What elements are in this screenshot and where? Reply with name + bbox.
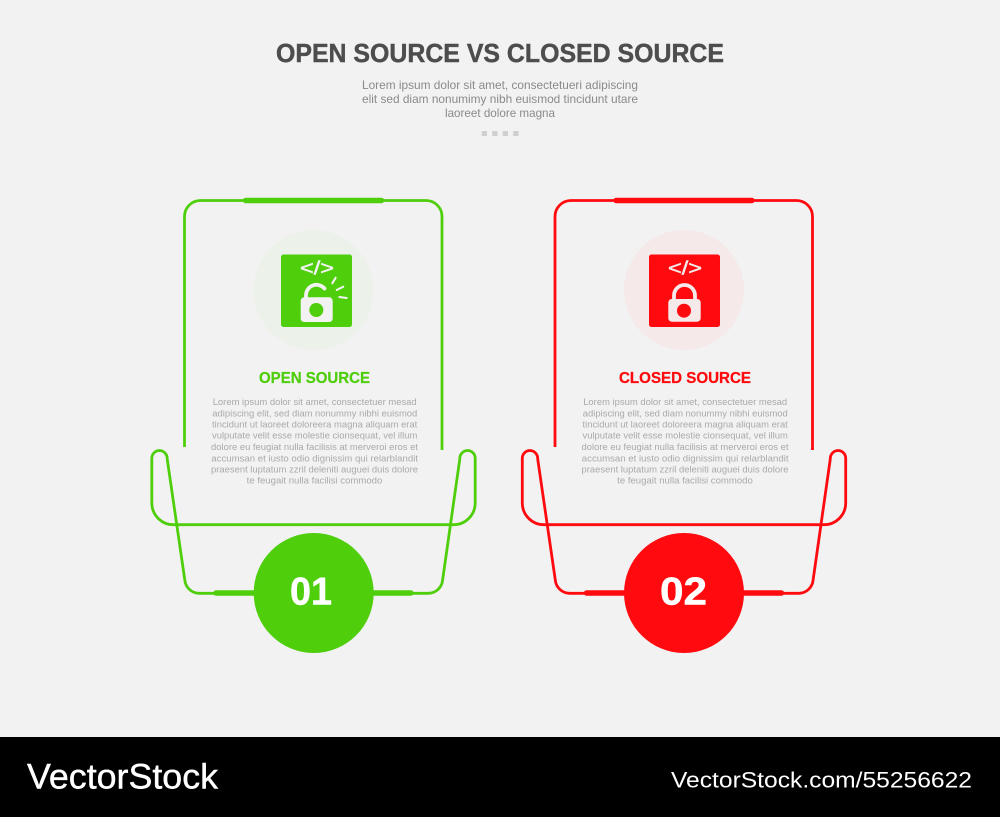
footer bar <box>0 737 1000 817</box>
bottom frame <box>152 450 475 593</box>
icon: locked padlock with code <box>649 254 720 327</box>
subtitle text: elit sed diam nonumimy nibh euismod tincidunt utare <box>362 92 638 106</box>
heading: open source: OPEN SOURCE <box>259 370 370 387</box>
icon background circle <box>624 230 744 350</box>
number badge 01: 01 <box>290 570 332 614</box>
body text: open source: praesent luptatum zzril deleniti auguei duis dolore <box>211 465 418 476</box>
body text: open source: vulputate velit esse molestie cionsequat, vel illum <box>212 431 417 442</box>
panel: closed source <box>522 200 846 653</box>
body text: open source: tincidunt ut laoreet doloreera magna aliquam erat <box>212 420 418 431</box>
body text: closed source: vulputate velit esse molestie cionsequat, vel illum <box>582 431 788 442</box>
number badge 02: 02 <box>660 570 707 614</box>
subtitle text <box>362 78 638 120</box>
icon: unlocked padlock with code: </> <box>300 258 334 280</box>
footer brand name: VectorStock <box>27 757 219 796</box>
bottom frame <box>522 450 846 593</box>
icon: locked padlock with code: </> <box>668 258 702 280</box>
body text: closed source: accumsan et iusto odio dignissim qui relarblandit <box>582 453 789 464</box>
body text: open source: Lorem ipsum dolor sit amet, consectetuer mesad <box>213 397 417 408</box>
body text: open source: te feugait nulla facilisi commodo <box>247 476 382 487</box>
body text: closed source: te feugait nulla facilisi commodo <box>617 476 753 487</box>
body text: open source <box>211 397 418 487</box>
body text: closed source: tincidunt ut laoreet doloreera magna aliquam erat <box>582 420 788 431</box>
panel: open source <box>152 200 475 653</box>
footer image url: VectorStock.com/55256622 <box>671 768 972 793</box>
body text: open source: accumsan et iusto odio dignissim qui relarblandit <box>211 453 418 464</box>
body text: closed source: dolore eu feugiat nulla facilisis at merveroi eros et <box>582 442 789 453</box>
body text: open source: dolore eu feugiat nulla facilisis at merveroi eros et <box>211 442 418 453</box>
body text: open source: adipiscing elit, sed diam nonummy nibhi euismod <box>212 408 417 419</box>
body text: closed source: adipiscing elit, sed diam nonummy nibhi euismod <box>583 408 788 419</box>
body text: closed source: Lorem ipsum dolor sit amet, consectetuer mesad <box>583 397 787 408</box>
icon: unlocked padlock with code <box>281 254 352 327</box>
top frame <box>184 200 442 450</box>
top frame <box>555 200 812 450</box>
subtitle text: Lorem ipsum dolor sit amet, consectetueri adipiscing <box>362 78 638 92</box>
icon background circle <box>254 230 374 350</box>
body text: closed source: praesent luptatum zzril deleniti auguei duis dolore <box>582 465 788 476</box>
title dots <box>482 131 518 136</box>
body text: closed source <box>582 397 789 487</box>
number badge 01 <box>254 533 374 653</box>
number badge 02 <box>624 533 744 653</box>
title: OPEN SOURCE VS CLOSED SOURCE <box>276 38 724 68</box>
subtitle text: laoreet dolore magna <box>445 106 555 120</box>
heading: closed source: CLOSED SOURCE <box>619 370 751 387</box>
